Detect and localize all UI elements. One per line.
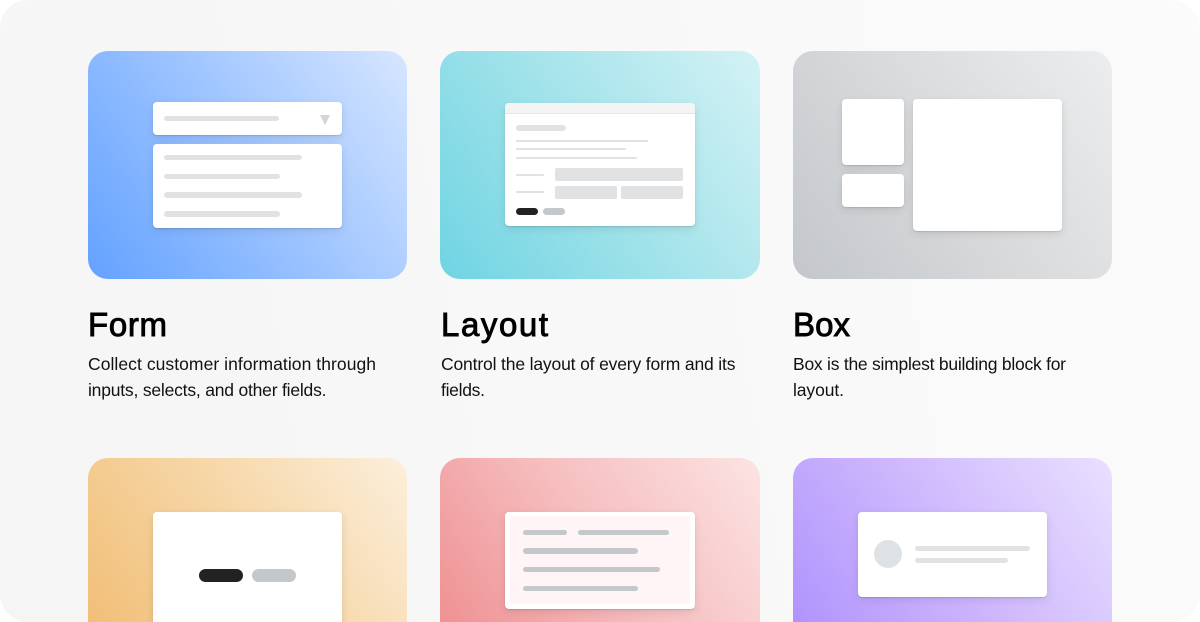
text: Box: Box xyxy=(793,306,850,343)
text: Box xyxy=(793,306,1066,400)
dropdown list xyxy=(153,144,342,228)
text: Layout: Layout xyxy=(441,306,548,343)
avatar xyxy=(874,540,902,568)
small square box xyxy=(842,99,904,165)
text: Form: inputs, selects, and other fields. xyxy=(88,380,326,400)
panel: Text illustration xyxy=(440,458,760,622)
text: Layout: fields. xyxy=(441,380,485,400)
panel: Layout illustration xyxy=(440,51,760,279)
profile card xyxy=(858,512,1047,597)
small wide box xyxy=(842,174,904,207)
text: Form: Form xyxy=(88,306,167,343)
panel: Form illustration xyxy=(88,51,407,279)
panel: Box illustration xyxy=(793,51,1112,279)
text card xyxy=(505,512,695,609)
form window xyxy=(505,103,695,226)
button container xyxy=(153,512,342,622)
text: Form: Collect customer information through xyxy=(88,354,376,374)
panel: Card illustration xyxy=(793,458,1112,622)
text: Box: Box is the simplest building block for xyxy=(793,354,1066,374)
tinted inner panel xyxy=(510,516,690,604)
text: Layout: Control the layout of every form and its xyxy=(441,354,736,374)
text: Form xyxy=(88,306,376,400)
panel: Buttons illustration xyxy=(88,458,407,622)
large box xyxy=(913,99,1062,231)
text: Box: layout. xyxy=(793,380,844,400)
text: Layout xyxy=(441,306,736,400)
select field xyxy=(153,102,342,135)
